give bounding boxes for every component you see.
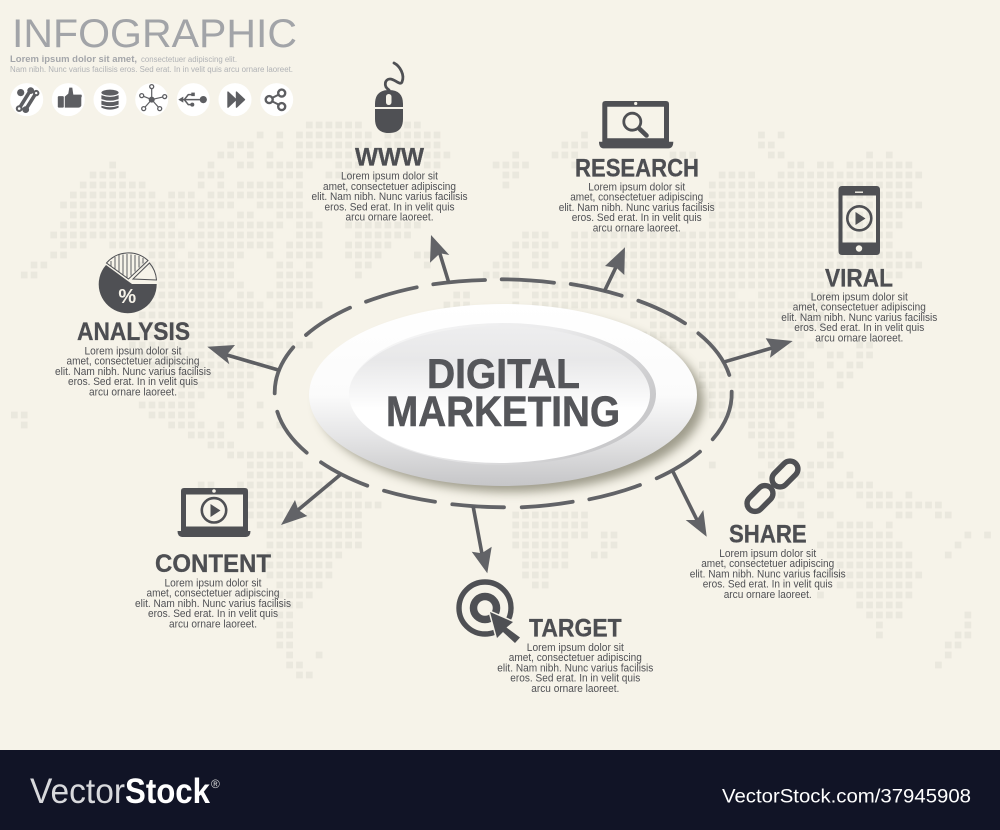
body text: www: eros. Sed erat. In in velit quis: [324, 201, 455, 213]
icon: laptop with play button: [178, 488, 250, 537]
title: INFOGRAPHIC: [12, 12, 297, 56]
body text: analysis: arcu ornare laoreet.: [89, 386, 177, 398]
body text: target: eros. Sed erat. In in velit quis: [510, 673, 641, 685]
body text: research: amet, consectetuer adipiscing: [570, 192, 703, 204]
arrow to www: [430, 235, 449, 281]
central plate drop shadow: [318, 312, 704, 492]
body text: analysis: amet, consectetuer adipiscing: [66, 356, 200, 368]
subtitle line two: Nam nibh. Nunc varius facilisis eros. Sed erat. In in velit quis arcu ornare laoreet.: [10, 65, 293, 74]
body text: research: arcu ornare laoreet.: [593, 222, 681, 234]
body text: viral: Lorem ipsum dolor sit: [811, 291, 908, 303]
section: www: [312, 63, 468, 224]
heading: research: RESEARCH: [575, 155, 699, 183]
body text: target: Lorem ipsum dolor sit: [527, 642, 624, 654]
body text: share: [690, 548, 846, 601]
body text: analysis: elit. Nam nibh. Nunc varius facilisis: [55, 366, 212, 378]
body text: viral: amet, consectetuer adipiscing: [793, 302, 926, 314]
dashed ring around plate: [275, 279, 732, 507]
icon: target with cursor: [459, 582, 520, 643]
section: content: [135, 488, 292, 630]
icon: database: [94, 83, 126, 116]
body text: target: arcu ornare laoreet.: [531, 683, 619, 695]
body text: viral: elit. Nam nibh. Nunc varius facilisis: [781, 312, 938, 324]
body text: www: elit. Nam nibh. Nunc varius facilisis: [312, 191, 468, 203]
body text: share: eros. Sed erat. In in velit quis: [703, 579, 833, 591]
body text: content: amet, consectetuer adipiscing: [146, 588, 280, 600]
footer logo: vector: Vector: [30, 772, 125, 811]
arrow to analysis: [207, 345, 278, 370]
heading: marketing: MARKETING: [386, 388, 620, 436]
body text: research: [559, 181, 715, 234]
section: target: [459, 582, 654, 695]
icon: network nodes: [135, 83, 168, 116]
icon: fast forward: [218, 83, 252, 116]
arrow to viral: [725, 338, 793, 362]
body text: research: elit. Nam nibh. Nunc varius facilisis: [559, 202, 715, 214]
body text: content: arcu ornare laoreet.: [169, 618, 257, 630]
footer bar: [0, 750, 1000, 830]
icon: pie chart with percent: [99, 253, 157, 313]
icon: thumbs up: [52, 83, 85, 116]
body text: research: eros. Sed erat. In in velit quis: [572, 212, 702, 224]
body text: analysis: eros. Sed erat. In in velit quis: [68, 376, 199, 388]
footer logo: registered mark: ®: [211, 777, 220, 791]
body text: viral: eros. Sed erat. In in velit quis: [794, 322, 925, 334]
section: share: [690, 458, 846, 601]
heading: viral: VIRAL: [825, 265, 893, 293]
body text: target: [497, 642, 654, 695]
body text: viral: arcu ornare laoreet.: [815, 332, 903, 344]
body text: content: eros. Sed erat. In in velit quis: [148, 608, 279, 620]
central plate: [309, 304, 697, 486]
section: analysis: [55, 253, 212, 398]
body text: share: Lorem ipsum dolor sit: [719, 548, 816, 560]
section: viral: [781, 186, 938, 344]
subtitle line one, bold: Lorem ipsum dolor sit amet,: [10, 54, 137, 64]
body text: content: Lorem ipsum dolor sit: [164, 577, 262, 589]
arrow to target: [472, 507, 492, 573]
plate inner ring: [349, 323, 656, 465]
dotted world map background: [11, 125, 994, 675]
section: research: [559, 101, 715, 234]
body text: share: elit. Nam nibh. Nunc varius facilisis: [690, 568, 846, 580]
icon: share nodes: [260, 83, 293, 116]
icon: pie chart with percent: %: [118, 286, 136, 308]
body text: www: Lorem ipsum dolor sit: [341, 171, 438, 183]
heading: target: TARGET: [529, 615, 622, 643]
icon: computer mouse: [375, 63, 403, 133]
body text: share: amet, consectetuer adipiscing: [701, 558, 834, 570]
plate inner dish: [349, 326, 650, 463]
icon: smartphone with play button: [838, 186, 880, 255]
heading: www: WWW: [355, 144, 424, 172]
heading: share: SHARE: [729, 521, 807, 549]
heading: digital: DIGITAL: [427, 350, 580, 397]
footer image id: VectorStock.com/37945908: [722, 787, 971, 808]
body text: www: [312, 171, 468, 224]
body text: content: elit. Nam nibh. Nunc varius facilisis: [135, 598, 292, 610]
body text: content: [135, 577, 292, 630]
arrow to research: [605, 247, 625, 290]
icon: usb symbol: [177, 83, 210, 116]
heading: content: CONTENT: [155, 550, 271, 578]
subtitle line one, regular: consectetuer adipiscing elit.: [141, 55, 237, 64]
icon: chain link: [744, 458, 801, 515]
body text: viral: [781, 291, 938, 344]
body text: analysis: Lorem ipsum dolor sit: [84, 345, 182, 357]
small icon row: [10, 83, 293, 116]
arrow to share: [673, 472, 707, 537]
body text: share: arcu ornare laoreet.: [724, 589, 812, 601]
body text: target: elit. Nam nibh. Nunc varius facilisis: [497, 662, 654, 674]
icon: laptop with magnifier: [599, 101, 673, 148]
body text: research: Lorem ipsum dolor sit: [588, 181, 685, 193]
icon: wrenches: [10, 83, 43, 116]
body text: www: arcu ornare laoreet.: [346, 212, 434, 224]
body text: www: amet, consectetuer adipiscing: [323, 181, 456, 193]
header: infographic title block: [10, 12, 297, 74]
arrow to content: [281, 475, 340, 525]
heading: analysis: ANALYSIS: [77, 318, 190, 346]
body text: target: amet, consectetuer adipiscing: [509, 652, 642, 664]
plate outer rim: [309, 304, 697, 486]
footer logo: stock: Stock: [125, 772, 210, 811]
body text: analysis: [55, 345, 212, 398]
